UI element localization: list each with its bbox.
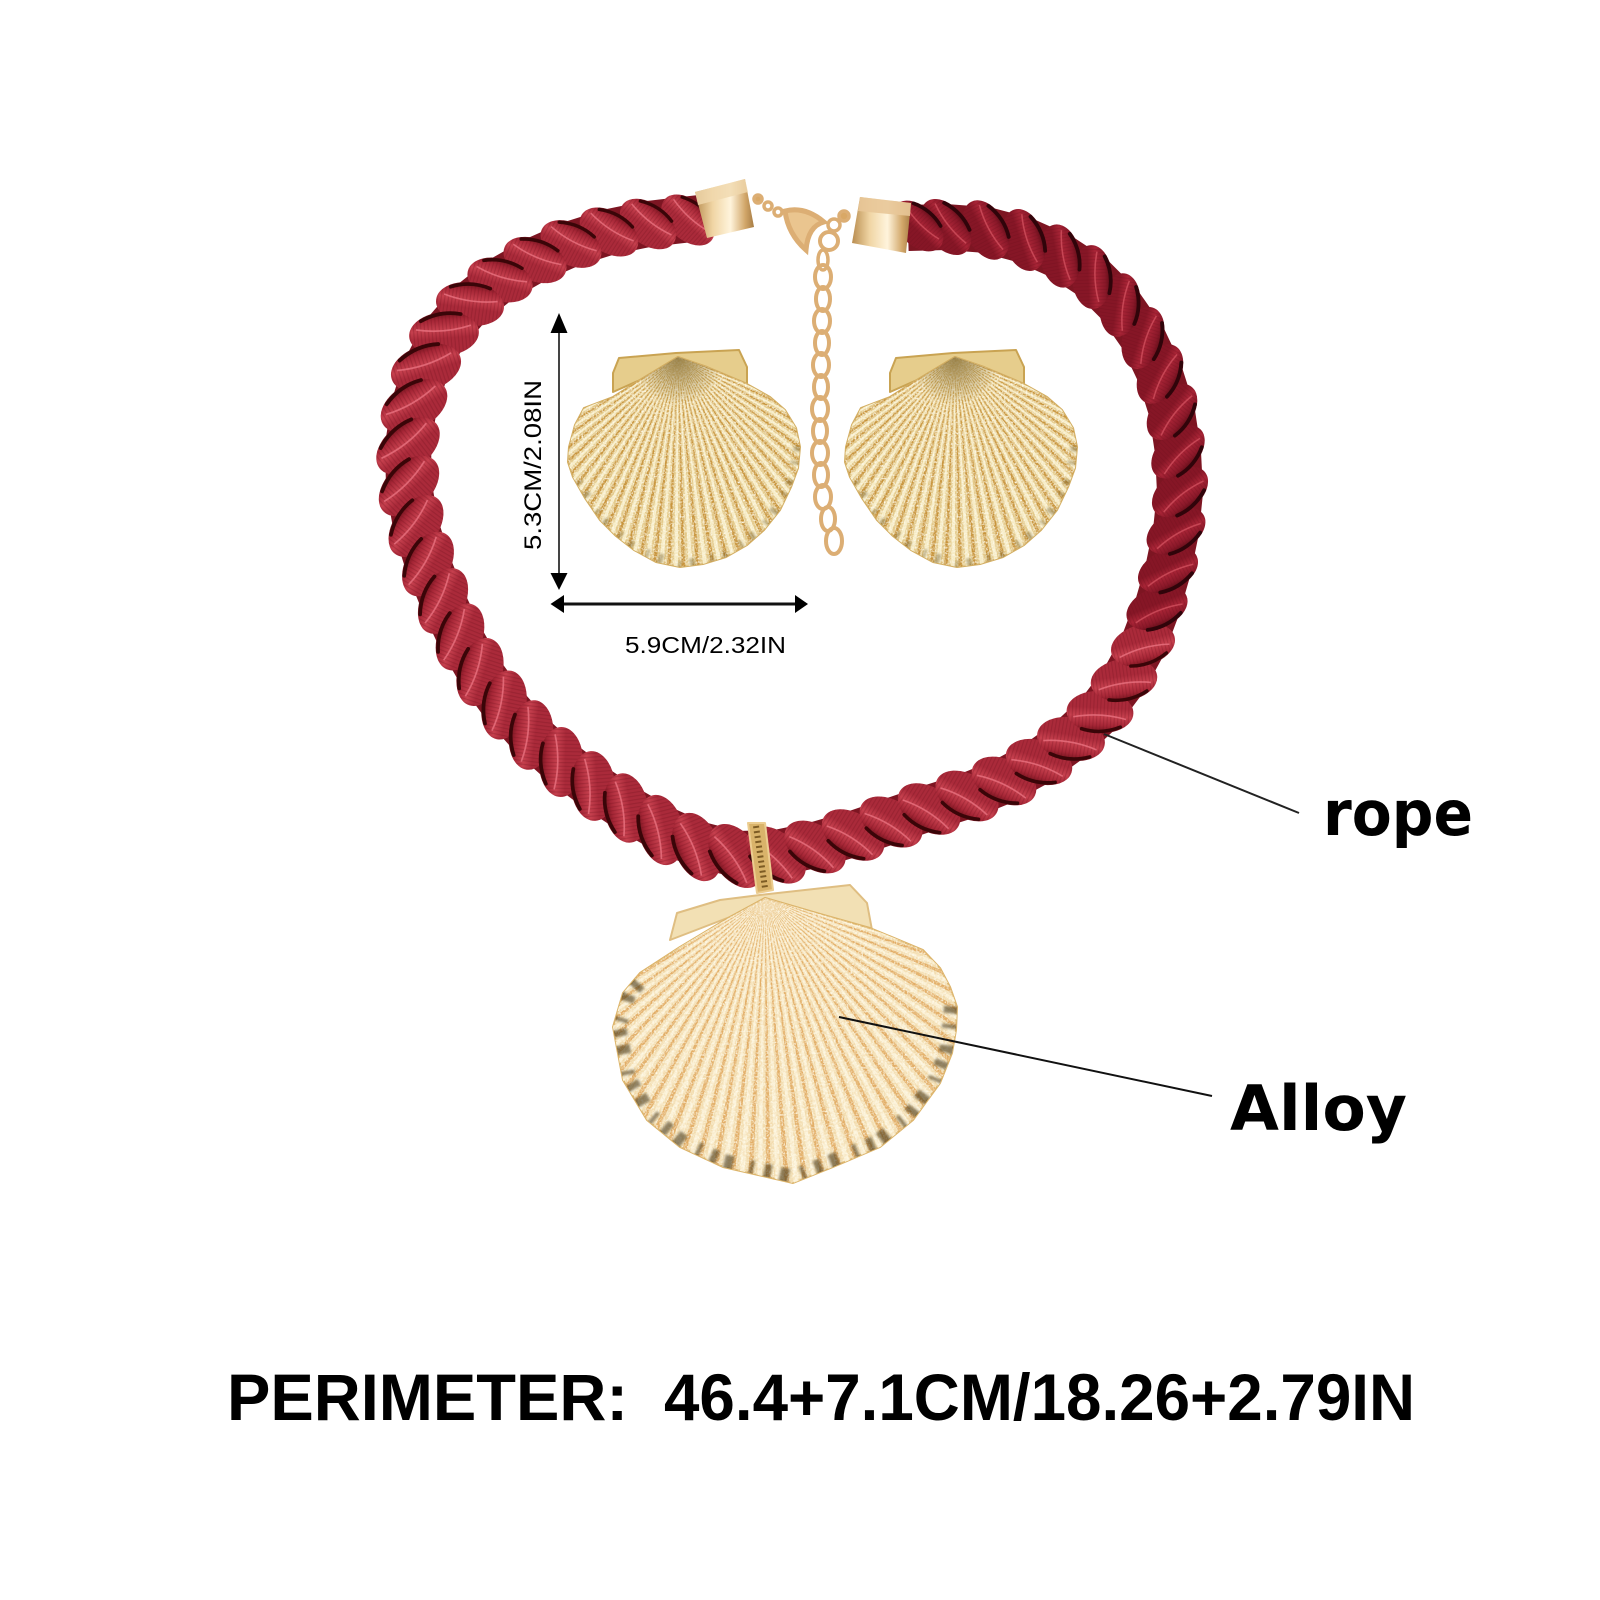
clasp and extender chain (754, 195, 849, 554)
perimeter measurement: 46.4+7.1CM/18.26+2.79IN (664, 1360, 1415, 1434)
label: alloy: Alloy (1230, 1072, 1407, 1145)
necklace (366, 179, 1218, 1190)
label: earring width: 5.9CM/2.32IN (625, 632, 786, 658)
arrow: earring width (550, 595, 808, 613)
label: earring height: 5.3CM/2.08IN (520, 380, 547, 550)
earring shell left (553, 232, 810, 575)
large shell pendant (612, 884, 958, 1184)
arrow: earring height (550, 313, 568, 590)
right gold end cap (852, 197, 911, 253)
label: rope: rope (1323, 777, 1473, 850)
leader line: alloy (839, 1017, 1212, 1096)
left gold end cap (695, 179, 754, 238)
perimeter measurement: PERIMETER: (227, 1360, 628, 1434)
perimeter measurement (227, 1360, 1415, 1434)
leader line: rope (1104, 734, 1299, 813)
twisted red rope (366, 185, 1218, 898)
earring shell right (830, 232, 1087, 575)
infographic canvas (231, 179, 1470, 1421)
pendant bail (748, 823, 773, 893)
